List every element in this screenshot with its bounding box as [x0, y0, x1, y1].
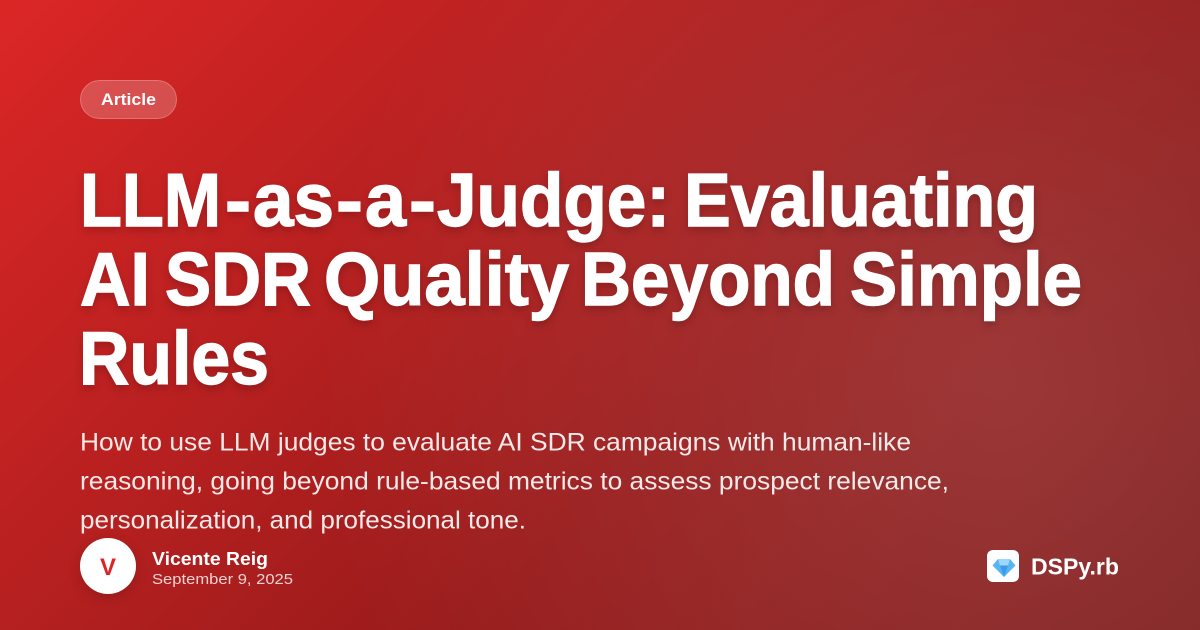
badge: Article: Article [101, 91, 156, 109]
badge: Article [80, 80, 176, 118]
title: AI [80, 237, 150, 321]
icon: gem [987, 550, 1019, 582]
brand block [987, 550, 1119, 582]
title: Quality [324, 237, 569, 321]
description: reasoning, going beyond rule-based metrics to assess prospect relevance, [80, 468, 949, 496]
description: personalization, and professional tone. [80, 506, 526, 534]
brand name: DSPy.rb [1031, 554, 1119, 580]
title: as [253, 158, 334, 242]
description [80, 428, 949, 534]
title: a [365, 158, 407, 242]
title: - [336, 158, 363, 242]
author name: Vicente Reig [152, 549, 268, 569]
title: - [225, 158, 251, 242]
title: - [409, 158, 436, 242]
title [79, 158, 1082, 400]
author block [80, 538, 293, 594]
avatar: V [100, 554, 116, 581]
title: Simple [850, 237, 1082, 321]
title: SDR [165, 237, 311, 321]
description: How to use LLM judges to evaluate AI SDR campaigns with human-like [80, 428, 911, 456]
avatar [80, 538, 136, 594]
title: LLM [80, 158, 221, 242]
title: Beyond [581, 237, 835, 321]
title: Rules [79, 316, 269, 400]
date: September 9, 2025 [152, 571, 293, 588]
title: Evaluating [684, 158, 1038, 242]
title: Judge: [437, 158, 670, 242]
